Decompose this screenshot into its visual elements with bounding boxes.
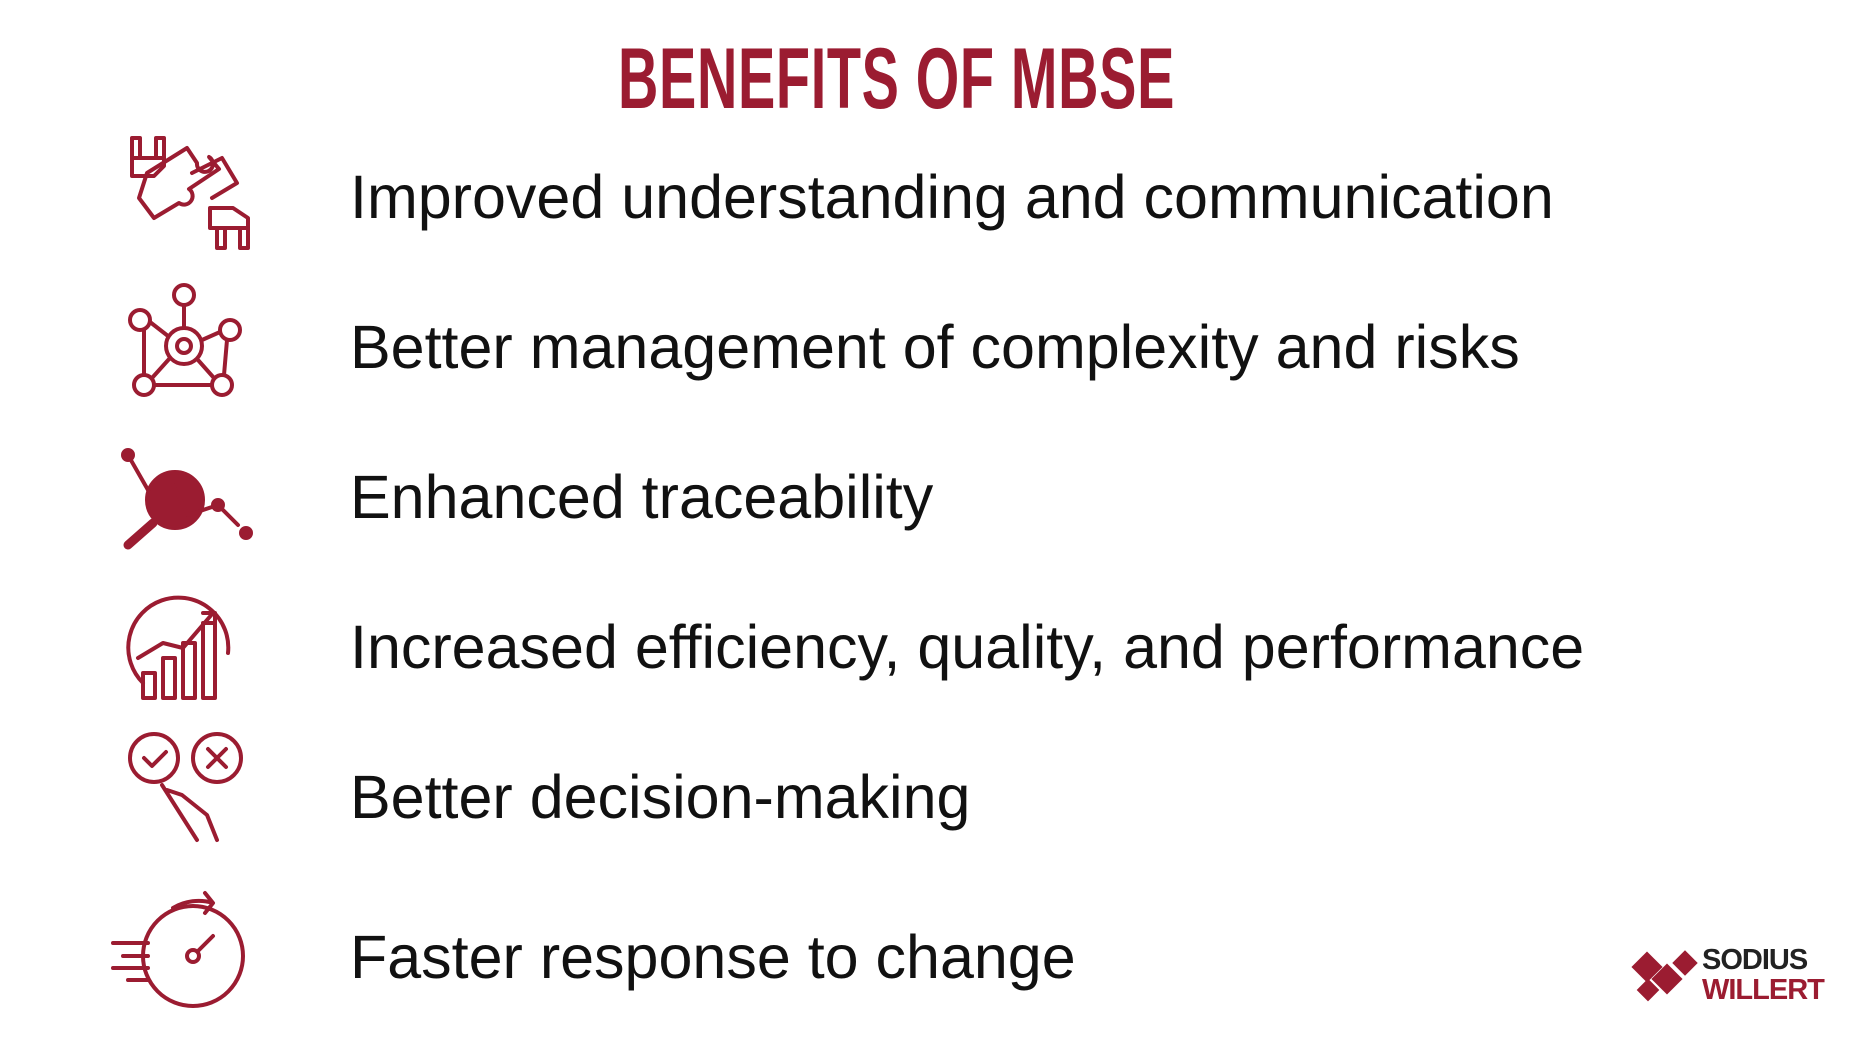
logo: Sodius Willert: SODIUS bbox=[1702, 944, 1807, 976]
icon: stopwatch with arrow bbox=[111, 890, 245, 1008]
icon: gear with bar chart bbox=[126, 596, 230, 700]
icon: gears network bbox=[128, 283, 242, 397]
title: BENEFITS OF MBSE bbox=[618, 31, 1175, 127]
text: row 1: Improved understanding and communication bbox=[350, 163, 1554, 231]
icon: decision check/cross bbox=[128, 732, 243, 842]
icon: puzzle hands bbox=[130, 136, 250, 250]
icon: traceability magnifier bbox=[121, 448, 253, 550]
text: row 3: Enhanced traceability bbox=[350, 463, 933, 531]
text: row 4: Increased efficiency, quality, and performance bbox=[350, 613, 1584, 681]
text: row 6: Faster response to change bbox=[350, 923, 1076, 991]
text: row 2: Better management of complexity and risks bbox=[350, 313, 1520, 381]
logo: Sodius Willert bbox=[1632, 944, 1825, 1006]
text: row 5: Better decision-making bbox=[350, 763, 970, 831]
logo: Sodius Willert: WILLERT bbox=[1702, 974, 1824, 1006]
